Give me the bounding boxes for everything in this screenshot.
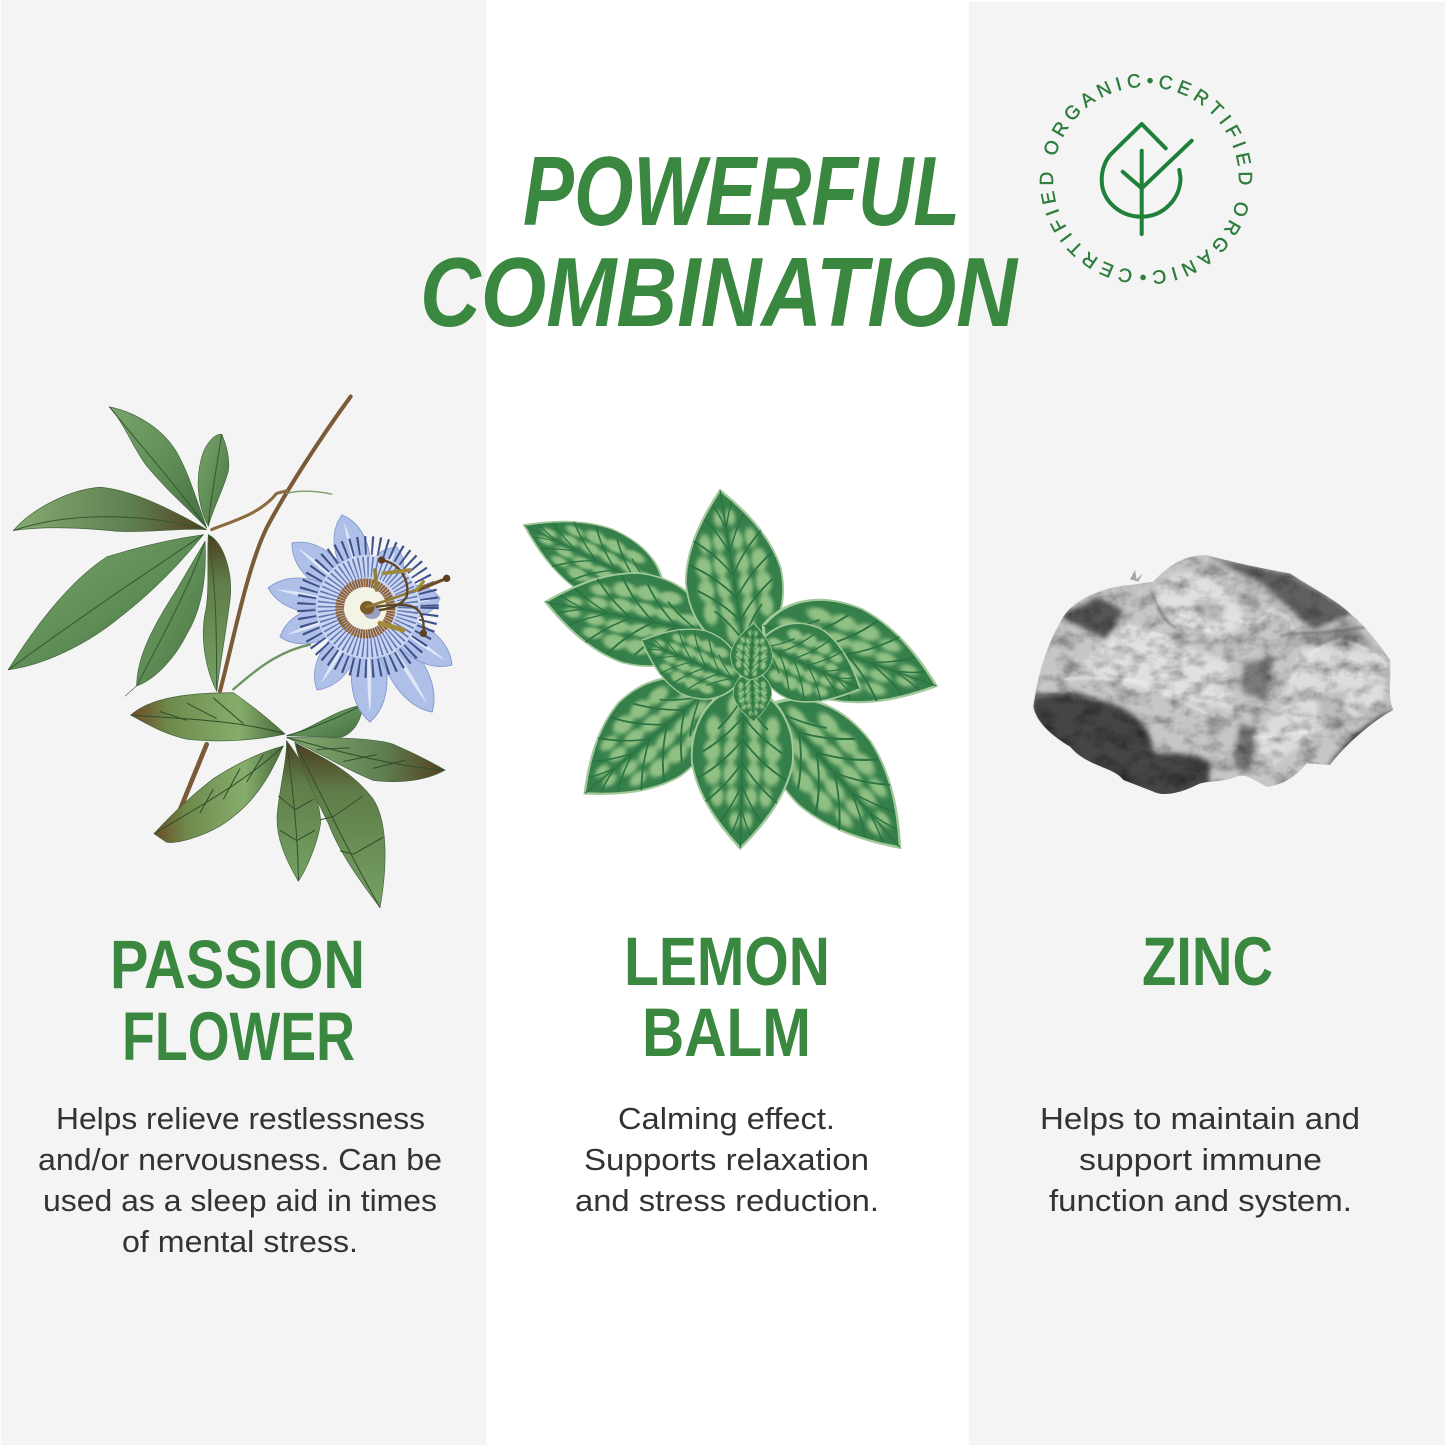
heading: passion flower: FLOWER (122, 998, 355, 1075)
title: COMBINATION (420, 237, 1019, 347)
panel: passion flower (1, 0, 486, 1445)
description: passion flower: Helps relieve restlessness (56, 1101, 425, 1136)
heading: lemon balm: BALM (642, 994, 811, 1071)
illustration: lemon balm leaves (509, 483, 952, 879)
heading: lemon balm (624, 923, 830, 1071)
badge ring text: CERTIFIED ORGANIC•CERTIFIED ORGANIC• (1040, 74, 1252, 284)
icon: leaf with check (1102, 124, 1192, 234)
heading: zinc: ZINC (1142, 923, 1273, 1000)
panel: lemon balm (486, 0, 969, 1445)
description: passion flower: and/or nervousness. Can be (38, 1142, 442, 1177)
illustration: passion flower branch (8, 396, 461, 908)
stem (180, 396, 351, 810)
description: lemon balm: Supports relaxation (584, 1142, 869, 1177)
leaves: lower cluster (131, 693, 445, 908)
description: zinc: support immune (1079, 1142, 1322, 1177)
description: passion flower (38, 1101, 442, 1259)
heading: passion flower (110, 926, 365, 1075)
title: POWERFUL (523, 136, 960, 246)
description: lemon balm (575, 1101, 879, 1218)
description: lemon balm: Calming effect. (618, 1101, 835, 1136)
illustration: zinc rock (1033, 555, 1394, 794)
leaves: upper cluster (8, 407, 231, 696)
small moss sprig (1130, 570, 1143, 582)
description: passion flower: used as a sleep aid in times (43, 1183, 437, 1218)
heading: lemon balm: LEMON (624, 923, 830, 1000)
description: passion flower: of mental stress. (122, 1224, 358, 1259)
branch and leaves (8, 396, 445, 908)
description: zinc: Helps to maintain and (1040, 1101, 1360, 1136)
badge: certified organic (1040, 74, 1252, 284)
heading: passion flower: PASSION (110, 926, 365, 1003)
description: lemon balm: and stress reduction. (575, 1183, 879, 1218)
panel: zinc (969, 2, 1445, 1445)
title (420, 136, 1019, 347)
description: zinc (1040, 1101, 1360, 1218)
flower: blue passion flower (265, 510, 461, 722)
description: zinc: function and system. (1049, 1183, 1352, 1218)
